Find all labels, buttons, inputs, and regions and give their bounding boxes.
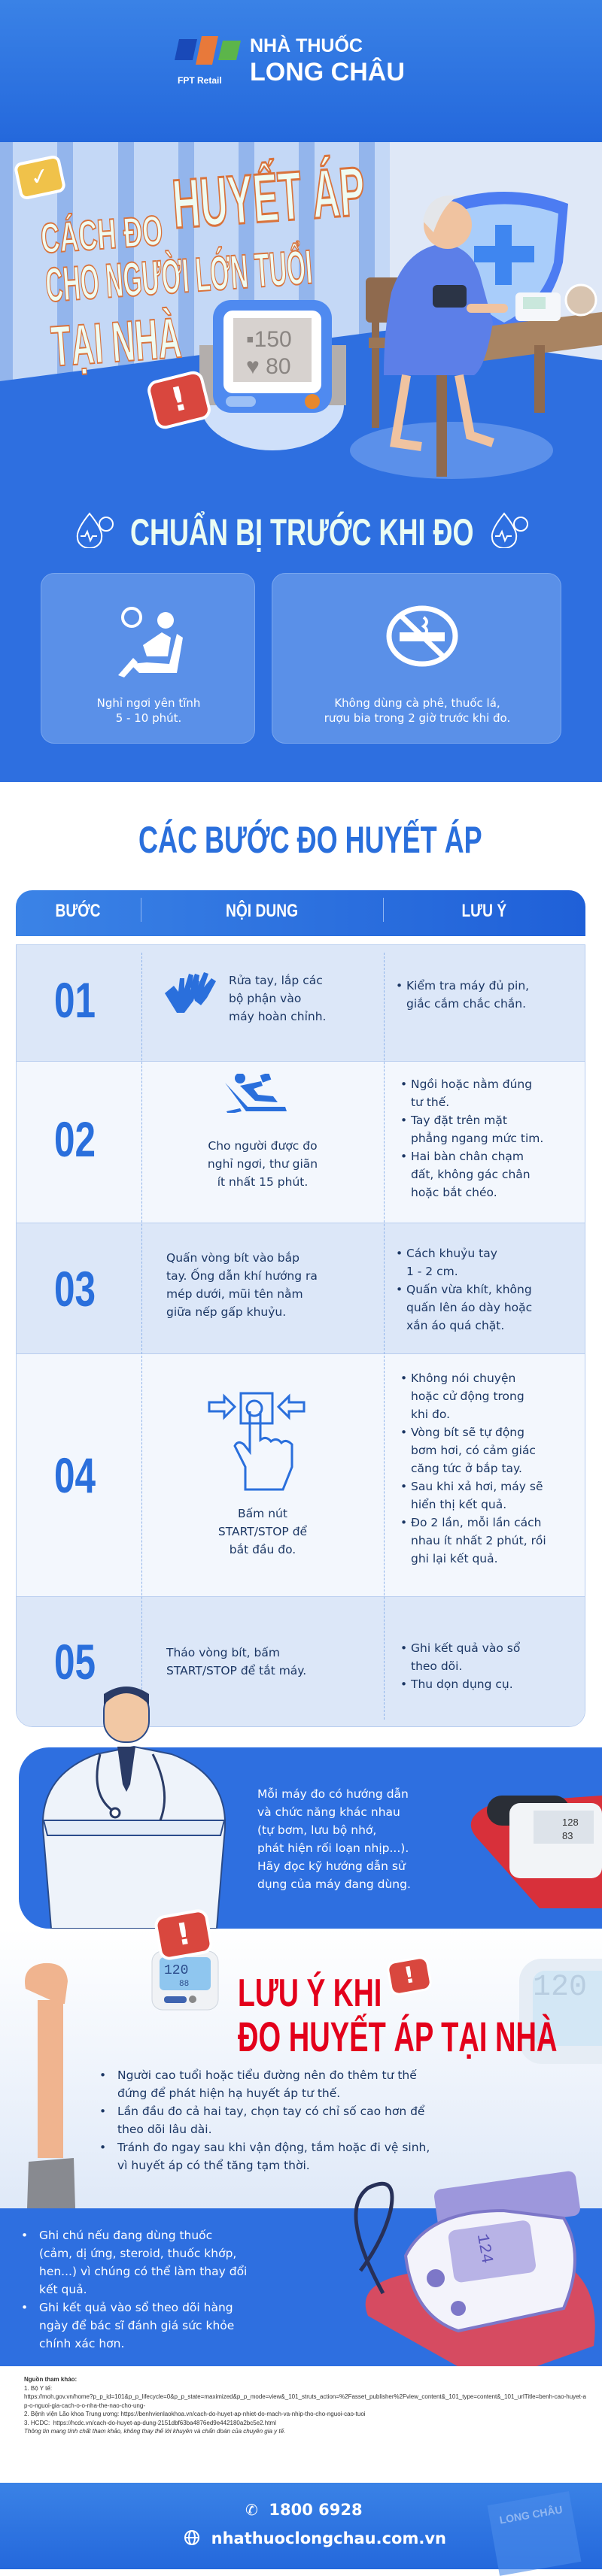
section: preparation <box>0 480 602 782</box>
row 03: tay. Ống dẫn khí hướng ra <box>166 1269 318 1283</box>
logo text <box>250 35 405 86</box>
illustration: large faded monitor: 120 <box>533 1971 587 2005</box>
table header: NỘI DUNG <box>226 901 298 921</box>
panel: references: 1. Bộ Y tế: <box>24 2385 52 2391</box>
icon: store <box>488 2491 581 2576</box>
text: device note <box>257 1787 411 1891</box>
text: medication list: kết quả. <box>39 2283 87 2296</box>
table body <box>16 944 585 1727</box>
row 01: giắc cắm chắc chắn. <box>406 997 526 1011</box>
text: medication list: hen...) vì chúng có thể làm thay đổi <box>39 2265 247 2278</box>
row 03: giữa nếp gấp khuỷu. <box>166 1305 286 1319</box>
row 04: 04 <box>54 1447 96 1503</box>
row 04: bơm hơi, có cảm giác <box>411 1444 536 1457</box>
row 01: Rửa tay, lắp các <box>229 974 323 987</box>
icon: warning badge small <box>385 1955 433 1997</box>
row 05: theo dõi. <box>411 1659 462 1673</box>
icon: warning badge <box>153 1908 214 1962</box>
row 04: nhau ít nhất 2 phút, rồi <box>411 1534 546 1547</box>
row 05: Ghi kết quả vào sổ <box>411 1641 520 1655</box>
row 04: bắt đầu đo. <box>230 1543 296 1556</box>
card: rest <box>41 573 255 744</box>
hero illustration <box>0 142 602 480</box>
title: CHO NGƯỜI LỚN TUỔI <box>44 240 314 312</box>
row 03: Quấn vừa khít, không <box>406 1283 532 1296</box>
row 03: quấn lên áo dày hoặc <box>406 1301 532 1314</box>
title: HUYẾT ÁP <box>170 153 367 243</box>
row 04: START/STOP để <box>218 1525 307 1538</box>
icon: relaxing person <box>225 1074 287 1113</box>
row 02: ít nhất 15 phút. <box>217 1175 308 1189</box>
text: device note: Mỗi máy đo có hướng dẫn <box>257 1787 409 1801</box>
text: rest <box>97 696 200 725</box>
row 05: START/STOP để tắt máy. <box>166 1664 306 1677</box>
row 01: 01 <box>54 972 96 1028</box>
table header: BƯỚC <box>56 901 101 921</box>
logo text: NHÀ THUỐC <box>250 35 363 56</box>
panel: references: Nguồn tham khảo: <box>24 2376 77 2383</box>
row 04 <box>17 1354 586 1597</box>
logo text: LONG CHÂU <box>250 58 405 86</box>
icon: warning badge: ! <box>167 379 191 420</box>
row 01: Kiểm tra máy đủ pin, <box>406 979 529 993</box>
row 02 <box>17 1062 586 1223</box>
text: notes list: vì huyết áp có thể tăng tạm thời. <box>117 2159 310 2172</box>
text: notes list: Lần đầu đo cả hai tay, chọn tay có chỉ số cao hơn để <box>117 2105 424 2118</box>
text: medication list: (cảm, dị ứng, steroid, thuốc khớp, <box>39 2247 236 2260</box>
text: notes list: Tránh đo ngay sau khi vận động, tắm hoặc đi vệ sinh, <box>117 2141 430 2154</box>
icon: check badge: ✓ <box>28 162 52 192</box>
footer <box>0 2483 602 2569</box>
text: avoid: rượu bia trong 2 giờ trước khi đo. <box>324 711 510 725</box>
illustration: elderly woman at table <box>366 192 602 477</box>
icon: blood pressure monitor: ♥ 80 <box>246 354 291 379</box>
row 02: Ngồi hoặc nằm đúng <box>411 1077 532 1091</box>
text: device note: Hãy đọc kỹ hướng dẫn sử <box>257 1859 406 1873</box>
text: medication list <box>23 2229 247 2350</box>
contact: phone: ✆ 1800 6928 <box>245 2501 363 2519</box>
row 01: máy hoàn chỉnh. <box>229 1010 326 1023</box>
illustration: raised arm <box>25 1962 75 2208</box>
text: medication list: Ghi chú nếu đang dùng thuốc <box>39 2229 212 2242</box>
section: medication notes <box>0 2208 602 2366</box>
title: CÁCH ĐO <box>39 206 164 262</box>
icon: no smoking <box>387 606 458 666</box>
section: notes at home <box>0 1929 602 2208</box>
heading: các bước đo huyết áp: CÁC BƯỚC ĐO HUYẾT ÁP <box>138 819 482 861</box>
illustration: blood pressure device: 128 <box>562 1817 579 1828</box>
icon: pressing button <box>208 1393 306 1490</box>
row 03: Cách khuỷu tay <box>406 1247 497 1260</box>
row 05 <box>17 1597 586 1728</box>
logo: FPT Retail <box>175 36 241 86</box>
row 05: Tháo vòng bít, bấm <box>166 1646 280 1659</box>
icon: rest chair <box>118 607 183 677</box>
illustration: small monitor: 120 <box>164 1963 188 1978</box>
row 04: Đo 2 lần, mỗi lần cách <box>411 1516 541 1529</box>
row 05: 05 <box>54 1634 96 1690</box>
text: device note: dụng của máy đang dùng. <box>257 1877 411 1891</box>
illustration: blood pressure device: 83 <box>562 1830 573 1841</box>
logo: FPT Retail: FPT Retail <box>178 75 222 86</box>
row 02: hoặc bắt chéo. <box>411 1186 497 1199</box>
icon: drop gauge left <box>77 513 114 548</box>
illustration: heart monitor: 124 <box>473 2232 496 2265</box>
icon: drop gauge right <box>491 513 528 548</box>
text: notes list: theo dõi lâu dài. <box>117 2123 212 2136</box>
row 02: tư thế. <box>411 1096 449 1109</box>
panel: references: https://moh.gov.vn/home?p_p_id=101&p_p_lifecycle=0&p_p_state=maximized&p_p_mode=view&_101_struts_action=%2Fasset_publisher%2Fview_content&_101_type=content&_101_urlTitle=benh-cao-huyet-ap-o-nguoi-gia-cach-o-o-nha-the-nao-cho-ung- <box>24 2393 586 2409</box>
text: medication list: ngày để bác sĩ đánh giá sức khỏe <box>39 2319 234 2332</box>
row 02: Cho người được đo <box>208 1139 318 1153</box>
illustration: small monitor <box>152 1951 218 2011</box>
text: rest: 5 - 10 phút. <box>116 711 181 725</box>
icon: store: LONG CHÂU <box>498 2503 564 2526</box>
text: device note: (tự bơm, lưu bộ nhớ, <box>257 1823 376 1837</box>
row 04: Vòng bít sẽ tự động <box>411 1426 524 1439</box>
row 04: Bấm nút <box>238 1507 287 1520</box>
illustration: doctor <box>42 1687 226 1929</box>
row 01 <box>17 945 586 1062</box>
row 04: khi đo. <box>411 1408 450 1421</box>
row 03: Quấn vòng bít vào bắp <box>166 1251 299 1265</box>
text: device note: và chức năng khác nhau <box>257 1805 400 1819</box>
table header: LƯU Ý <box>462 901 506 921</box>
heading: lưu ý khi đo huyết áp tại nhà: LƯU Ý KHI <box>238 1971 382 2015</box>
panel: references: Thông tin mang tính chất tham khảo, không thay thế lời khuyên và chẩn đoán của chuyên gia y tế. <box>24 2428 285 2435</box>
icon: warning badge small: ! <box>402 1962 417 1990</box>
text: notes list <box>101 2068 430 2172</box>
panel: device note <box>19 1747 602 1929</box>
row 02: Tay đặt trên mặt <box>411 1114 507 1127</box>
title: TẠI NHÀ <box>49 306 184 379</box>
text: notes list: Người cao tuổi hoặc tiểu đường nên đo thêm tư thế <box>117 2068 417 2082</box>
icon: blood pressure monitor <box>199 300 346 450</box>
row 02: Hai bàn chân chạm <box>411 1150 524 1163</box>
illustration: heart monitor <box>354 2171 595 2366</box>
row 03 <box>17 1223 586 1354</box>
text: notes list: đứng để phát hiện hạ huyết áp tư thế. <box>117 2087 340 2100</box>
row 03: 03 <box>54 1261 96 1317</box>
icon: blood pressure monitor: ▪150 <box>246 327 292 352</box>
text: rest: Nghỉ ngơi yên tĩnh <box>97 696 200 710</box>
contact: website: nhathuoclongchau.com.vn <box>211 2529 446 2547</box>
icon: hands <box>165 972 216 1013</box>
illustration: small monitor: 88 <box>179 1980 189 1989</box>
row 05: Thu dọn dụng cụ. <box>411 1677 513 1691</box>
text: avoid: Không dùng cà phê, thuốc lá, <box>334 696 500 710</box>
panel: references <box>0 2366 602 2487</box>
row 02: 02 <box>54 1111 96 1167</box>
row 02: đất, không gác chân <box>411 1168 531 1181</box>
row 01: bộ phận vào <box>229 992 301 1005</box>
icon: warning badge: ! <box>174 1917 193 1953</box>
row 04: hiển thị kết quả. <box>411 1498 506 1511</box>
heading: lưu ý khi đo huyết áp tại nhà: ĐO HUYẾT ÁP TẠI NHÀ <box>238 2013 558 2060</box>
text: medication list: Ghi kết quả vào sổ theo dõi hàng <box>39 2301 233 2314</box>
text: device note: phát hiện rối loạn nhịp...). <box>257 1841 409 1855</box>
text: medication list: chính xác hơn. <box>39 2337 124 2350</box>
row 03: mép dưới, mũi tên nằm <box>166 1287 303 1301</box>
title <box>39 153 367 379</box>
row 02: phẳng ngang mức tim. <box>411 1132 543 1145</box>
panel: references: 3. HCDC: https://hcdc.vn/cach-do-huyet-ap-dung-2151dbf63ba4876ed9e442180a2bc5e2.html <box>24 2420 276 2426</box>
row 04: hoặc cử động trong <box>411 1390 524 1403</box>
panel: references: 2. Bệnh viện Lão khoa Trung ương: https://benhvienlaokhoa.vn/cach-do-huyet-ap-nhiet-do-mach-va-nhip-tho-cho-nguoi-cao-tuoi <box>24 2411 366 2417</box>
row 03: 1 - 2 cm. <box>406 1265 458 1278</box>
illustration: large faded monitor <box>519 1959 602 2064</box>
row 04: căng tức ở bắp tay. <box>411 1462 522 1475</box>
table: steps <box>16 890 585 1727</box>
row 04: Không nói chuyện <box>411 1371 515 1385</box>
card: no coffee/smoking <box>272 573 561 744</box>
illustration: blood pressure device <box>471 1796 602 1908</box>
row 03: xắn áo quá chặt. <box>406 1319 504 1332</box>
heading: chuẩn bị trước khi đo: CHUẨN BỊ TRƯỚC KHI ĐO <box>130 511 474 553</box>
row 04: Sau khi xả hơi, máy sẽ <box>411 1480 543 1493</box>
text: avoid <box>324 696 510 725</box>
icon: warning badge <box>145 369 213 431</box>
header bar <box>0 0 602 142</box>
table header <box>16 890 585 936</box>
row 02: nghỉ ngơi, thư giãn <box>208 1157 318 1171</box>
row 04: ghi lại kết quả. <box>411 1552 498 1565</box>
icon: check badge <box>13 154 67 201</box>
heading: lưu ý khi đo huyết áp tại nhà <box>238 1971 558 2060</box>
